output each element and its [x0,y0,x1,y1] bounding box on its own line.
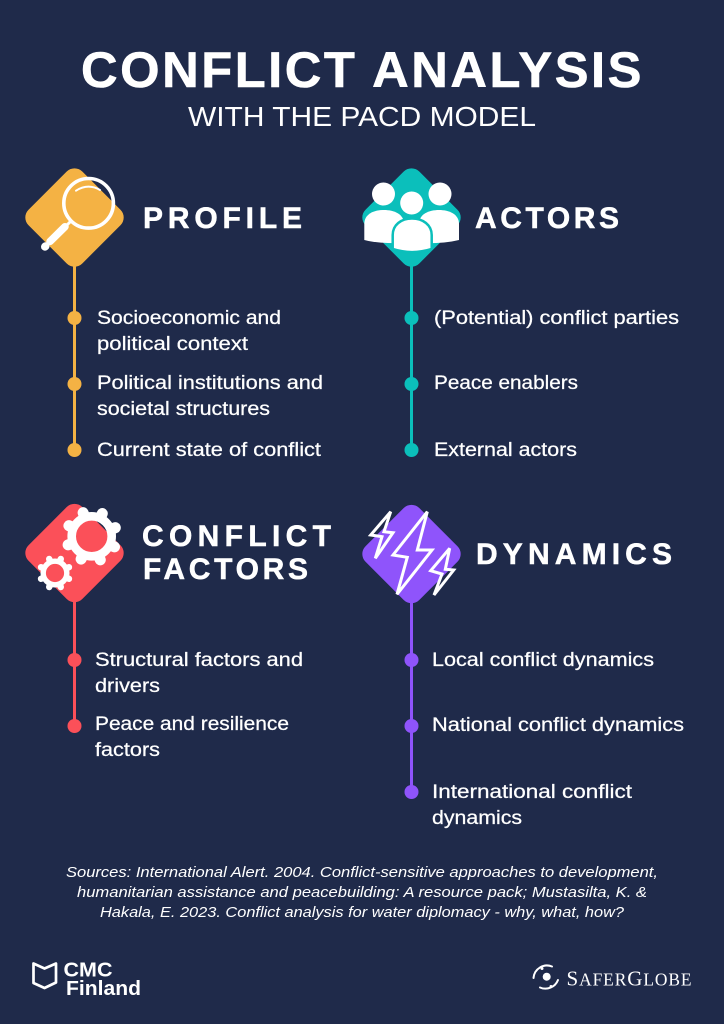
list: profile [97,308,323,461]
heading: conflict factors [142,520,331,586]
list: dynamics: International conflict [432,782,633,803]
diamond: actors [358,164,465,271]
icon: lightning bolts [371,512,454,595]
diamond: profile [21,164,128,271]
list: actors: (Potential) conflict parties [434,308,679,329]
heading: profile: PROFILE [143,202,302,235]
wordmark: SaferGlobe: SAFERGLOBE [566,967,692,991]
timeline: profile [68,250,82,457]
heading: actors: ACTORS [475,202,619,235]
wordmark: CMC Finland: Finland [66,978,141,1000]
icon: globe [534,966,558,989]
timeline: actors [404,250,418,457]
icon: magnifying glass [45,178,113,247]
wordmark: CMC Finland: CMC [64,960,112,982]
sources text block: Sources: International Alert. 2004. Conflict-sensitive approaches to development, [66,865,658,881]
list: profile: societal structures [97,399,270,420]
title: CONFLICT ANALYSIS [81,42,644,98]
sources text block: humanitarian assistance and peacebuilding: A resource pack; Mustasilta, K. & [77,885,647,901]
list: conflict factors: factors [95,740,160,761]
timeline: conflict factors [68,590,82,733]
list: conflict factors: drivers [95,676,160,697]
panel: dynamics [358,500,684,829]
sources text block: Hakala, E. 2023. Conflict analysis for water diplomacy - why, what, how? [100,905,625,921]
list: profile: political context [97,334,249,355]
list: actors [434,308,679,461]
list: profile: Socioeconomic and [97,308,281,329]
wordmark: CMC Finland [64,960,141,1000]
list: actors: Peace enablers [434,373,578,394]
list: dynamics: National conflict dynamics [432,715,684,736]
list: conflict factors: Structural factors and [95,650,303,671]
icon: gears [41,513,115,587]
list: profile: Political institutions and [97,373,323,394]
panel: profile [21,164,323,461]
panel: conflict factors [21,499,331,761]
icon: group of people [364,182,459,252]
subtitle: WITH THE PACD MODEL [188,101,536,132]
heading: conflict factors: FACTORS [143,553,308,586]
list: dynamics [432,650,684,829]
timeline: dynamics [404,590,418,799]
diamond: dynamics [358,500,465,608]
list: dynamics: dynamics [432,808,522,829]
logo: SaferGlobe [534,966,692,991]
list: profile: Current state of conflict [97,440,322,461]
diamond: conflict factors [21,499,128,607]
logo: CMC Finland [34,960,141,1000]
list: dynamics: Local conflict dynamics [432,650,654,671]
sources text block [66,865,658,921]
icon: open book shield [34,964,56,988]
heading: dynamics: DYNAMICS [476,538,672,571]
list: actors: External actors [434,440,577,461]
list: conflict factors: Peace and resilience [95,714,289,735]
heading: conflict factors: CONFLICT [142,520,331,553]
list: conflict factors [95,650,303,761]
panel: actors [358,164,679,461]
